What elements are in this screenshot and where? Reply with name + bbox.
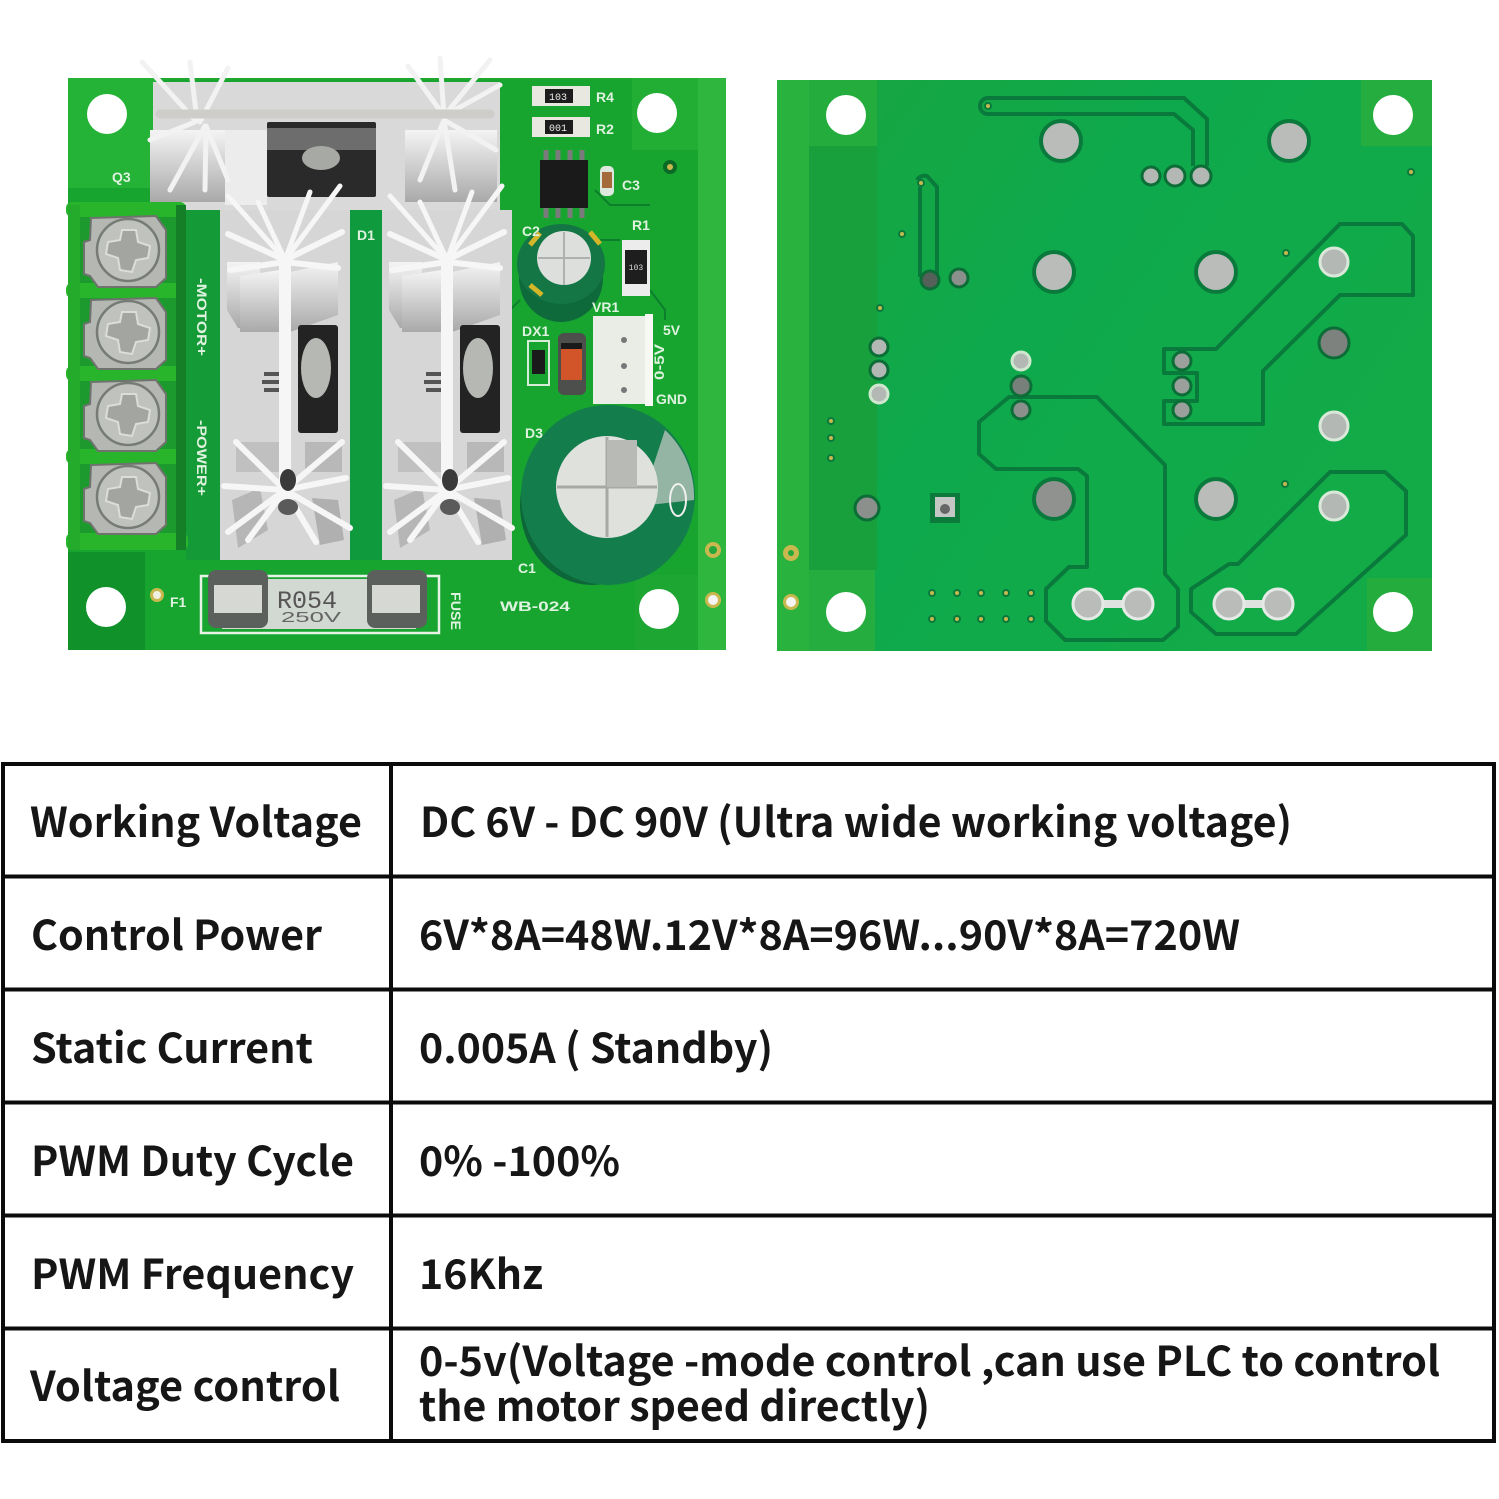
diodes bbox=[528, 333, 586, 395]
IC chip bbox=[540, 150, 588, 218]
board silkscreen labels: F1 bbox=[170, 594, 187, 610]
board silkscreen labels bbox=[112, 89, 687, 630]
small electrolytic capacitor bbox=[517, 224, 605, 322]
row: working voltage bbox=[30, 789, 1292, 849]
panel: circuit board back view bbox=[777, 80, 1432, 651]
row: control power: Control Power bbox=[31, 902, 322, 962]
board silkscreen labels: -MOTOR+ bbox=[194, 278, 210, 356]
row: voltage control: the motor speed directly) bbox=[419, 1373, 930, 1433]
row: PWM duty cycle: PWM Duty Cycle bbox=[31, 1128, 354, 1188]
board silkscreen labels: 0-5V bbox=[651, 343, 667, 380]
mid heat sinks with transistors bbox=[220, 186, 512, 560]
square test pad bbox=[930, 493, 960, 523]
board silkscreen labels: FUSE bbox=[448, 592, 464, 630]
row: PWM duty cycle: 0% -100% bbox=[419, 1128, 620, 1188]
resistor R1 bbox=[622, 240, 650, 296]
row: voltage control bbox=[29, 1328, 1440, 1433]
row: PWM duty cycle bbox=[31, 1128, 620, 1188]
row: PWM frequency: PWM Frequency bbox=[31, 1241, 354, 1301]
copper traces bbox=[917, 98, 1413, 640]
board silkscreen labels: VR1 bbox=[592, 299, 619, 315]
board silkscreen labels: 5V bbox=[663, 322, 681, 338]
board silkscreen labels: R4 bbox=[596, 89, 614, 105]
board silkscreen labels: DX1 bbox=[522, 323, 549, 339]
board silkscreen labels: R2 bbox=[596, 121, 614, 137]
board silkscreen labels: WB-024 bbox=[500, 598, 570, 614]
edge pads bbox=[783, 545, 799, 610]
row: static current: Static Current bbox=[31, 1015, 313, 1075]
board base bbox=[777, 80, 1432, 651]
resistors R4 and R2: 103 bbox=[549, 93, 567, 104]
small vias bbox=[828, 103, 1414, 622]
board base bbox=[68, 78, 726, 650]
board silkscreen labels: R1 bbox=[632, 217, 650, 233]
row: working voltage: DC 6V - DC 90V (Ultra wide working voltage) bbox=[420, 789, 1292, 849]
mounting holes bbox=[86, 93, 679, 629]
large electrolytic capacitor C1 bbox=[520, 405, 695, 585]
edge pads bbox=[150, 160, 721, 608]
board silkscreen labels: D1 bbox=[357, 227, 375, 243]
resistor R1: 103 bbox=[629, 264, 643, 273]
resistors R4 and R2: 001 bbox=[549, 124, 567, 135]
top heat sink with transistor Q3 bbox=[142, 58, 500, 210]
row: control power: 6V*8A=48W.12V*8A=96W...90V*8A=720W bbox=[419, 902, 1240, 962]
board silkscreen labels: -POWER+ bbox=[194, 420, 210, 496]
mounting holes bbox=[826, 95, 1413, 632]
row: PWM frequency bbox=[31, 1241, 543, 1301]
row: static current: 0.005A ( Standby) bbox=[419, 1015, 773, 1075]
board silkscreen labels: C2 bbox=[522, 223, 540, 239]
large solder pads bbox=[1034, 121, 1309, 519]
row: PWM frequency: 16Khz bbox=[419, 1241, 543, 1301]
row: control power bbox=[31, 902, 1240, 962]
fuse: R054 bbox=[277, 587, 337, 616]
row: voltage control: 0-5v(Voltage -mode control ,can use PLC to control bbox=[419, 1328, 1440, 1388]
table grid bbox=[3, 764, 1494, 1441]
screw terminal block bbox=[66, 202, 188, 550]
resistors R4 and R2 bbox=[532, 86, 590, 137]
panel: circuit board front view bbox=[66, 58, 726, 650]
fuse: 250V bbox=[281, 609, 341, 626]
row: working voltage: Working Voltage bbox=[30, 789, 362, 849]
specification table bbox=[3, 764, 1494, 1441]
white connector VR1 bbox=[593, 314, 653, 406]
board silkscreen labels: C3 bbox=[622, 177, 640, 193]
row: static current bbox=[31, 1015, 773, 1075]
row: voltage control: Voltage control bbox=[29, 1353, 340, 1413]
board silkscreen labels: GND bbox=[656, 391, 687, 407]
fuse bbox=[201, 570, 439, 633]
board silkscreen labels: C1 bbox=[518, 560, 536, 576]
board silkscreen labels: Q3 bbox=[112, 169, 131, 185]
small solder pads bbox=[855, 166, 1349, 520]
board silkscreen labels: D3 bbox=[525, 425, 543, 441]
capacitor C3 bbox=[600, 166, 614, 196]
terminal solder bridges bbox=[1073, 589, 1293, 619]
